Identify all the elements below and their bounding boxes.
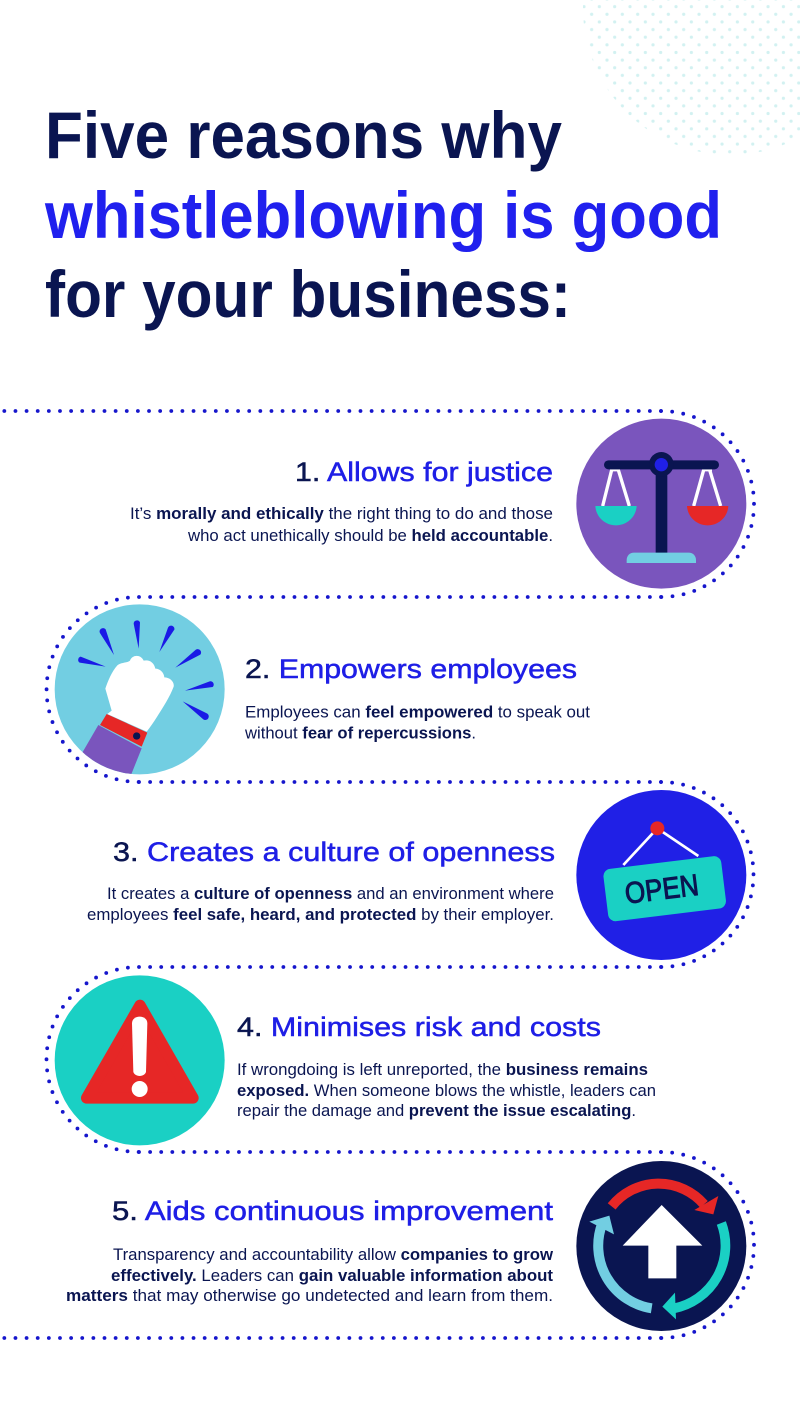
icon: warning triangle xyxy=(55,975,225,1145)
panel: reason 2 xyxy=(55,604,590,780)
icon: improvement cycle xyxy=(576,1161,746,1331)
text block 1: It’s morally and ethically the right thing to do and those xyxy=(130,505,553,523)
icon: open sign: OPEN xyxy=(623,869,701,911)
text block 3: It creates a culture of openness and an environment where xyxy=(107,885,554,903)
text block 1: who act unethically should be held accountable. xyxy=(187,527,553,545)
heading 1: 1. Allows for justice xyxy=(295,457,553,487)
text block 2 xyxy=(244,704,590,742)
icon: open sign xyxy=(576,790,746,960)
halftone dot circle decoration xyxy=(583,0,800,155)
panel: reason 5 xyxy=(66,1161,746,1331)
text block 2: without fear of repercussions. xyxy=(244,724,476,742)
text block 1 xyxy=(130,505,553,545)
text block 5 xyxy=(66,1246,554,1305)
title: whistleblowing is good xyxy=(44,178,722,252)
title: Five reasons why xyxy=(45,98,562,172)
panel: reason 4 xyxy=(55,975,656,1145)
text block 5: effectively. Leaders can gain valuable information about xyxy=(111,1267,554,1285)
heading 5: 5. Aids continuous improvement xyxy=(112,1196,554,1226)
panel: reason 3 xyxy=(87,790,746,960)
text block 3 xyxy=(87,885,554,924)
panel: reason 1 xyxy=(130,419,746,589)
icon: scales of justice xyxy=(576,419,746,589)
text block 4: If wrongdoing is left unreported, the business remains xyxy=(237,1061,648,1079)
title: for your business: xyxy=(45,257,571,331)
text block 4: exposed. When someone blows the whistle, leaders can xyxy=(237,1082,656,1100)
dotted serpentine connector xyxy=(0,411,754,1338)
heading 2: 2. Empowers employees xyxy=(245,654,577,684)
heading 3: 3. Creates a culture of openness xyxy=(113,837,555,867)
text block 5: Transparency and accountability allow companies to grow xyxy=(113,1246,553,1264)
text block 3: employees feel safe, heard, and protected by their employer. xyxy=(87,906,554,924)
title xyxy=(44,98,722,331)
text block 4: repair the damage and prevent the issue escalating. xyxy=(237,1102,636,1120)
heading 4: 4. Minimises risk and costs xyxy=(237,1012,601,1042)
text block 4 xyxy=(237,1061,656,1120)
text block 5: matters that may otherwise go undetected and learn from them. xyxy=(66,1287,553,1305)
icon: raised fist xyxy=(55,604,225,780)
text block 2: Employees can feel empowered to speak out xyxy=(245,704,590,722)
